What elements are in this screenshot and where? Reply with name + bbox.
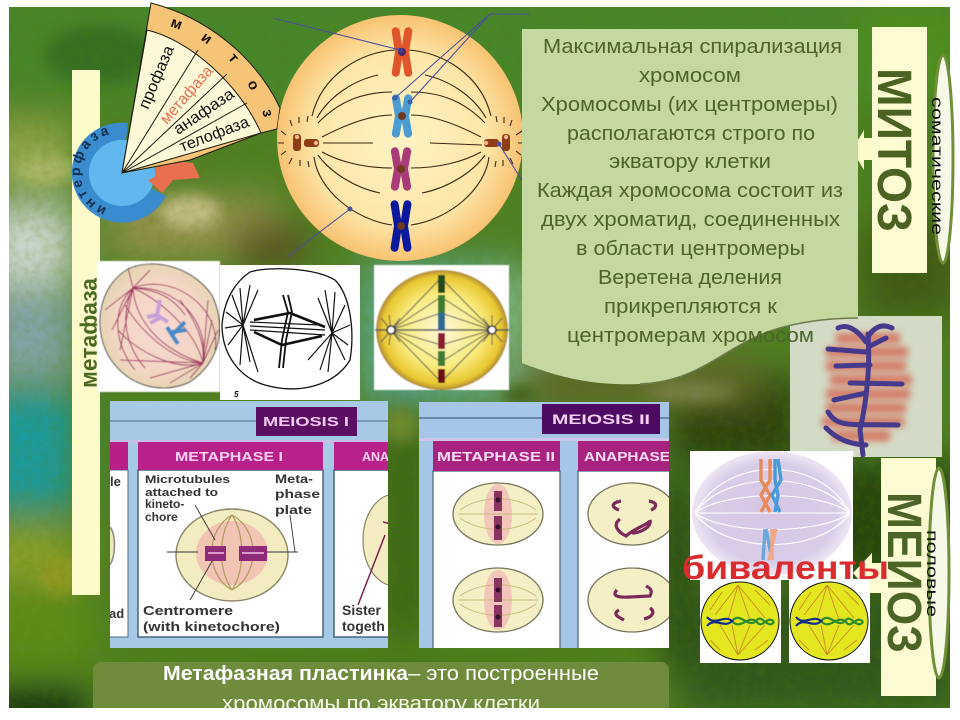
- mitosis phase fan: о: [243, 77, 263, 93]
- label: половые: половые: [923, 530, 940, 617]
- label: МЕИОЗ: [877, 458, 936, 696]
- text: metaphase I labels: chore: [145, 510, 178, 524]
- text: metaphase I labels: kineto-: [145, 497, 184, 511]
- diagram: yellow spindle cell: [374, 265, 509, 390]
- icon: orange return arrow: [148, 160, 200, 193]
- heading: MEIOSIS II: [542, 404, 660, 434]
- text panel: metaphase in mitosis: двух хроматид, соединенных: [541, 209, 840, 231]
- column: metaphase II: [433, 441, 560, 651]
- mitosis phase fan: [122, 3, 280, 173]
- mitosis phase fan: и: [198, 29, 215, 48]
- text panel: metaphase in mitosis: Максимальная спирализация: [543, 36, 842, 58]
- label: половые: [923, 468, 949, 678]
- text: metaphase I labels: attached to: [145, 487, 218, 499]
- micrograph: pink spindle cell: [97, 261, 220, 392]
- text: metaphase I labels: (with kinetochore): [143, 620, 280, 634]
- left label bar: метафаза: метафаза: [76, 277, 103, 388]
- leader lines: [273, 14, 530, 257]
- column: anaphase I fragment: ANA: [362, 450, 389, 464]
- label: биваленты: биваленты: [682, 549, 889, 586]
- column: metaphase I: [138, 442, 323, 637]
- label: МИТОЗ: [867, 27, 927, 273]
- centrosomes: [293, 134, 510, 151]
- cell diagram: metaphase spindle: [273, 14, 530, 261]
- text panel: metaphase in mitosis: прикрепляются к: [604, 296, 777, 318]
- panel: meiosis I: [110, 401, 388, 648]
- diagram: yellow cell with bivalents right: [789, 579, 870, 663]
- cell: metaphase I: [167, 505, 298, 601]
- text: metaphase I labels: phase: [275, 487, 320, 501]
- cell: anaphase II bottom: [588, 568, 676, 632]
- label: МЕИОЗ: МЕИОЗ: [877, 492, 930, 653]
- column: anaphase II: ANAPHASE: [584, 450, 670, 464]
- text panel: metaphase in mitosis: Хромосомы (их центромеры): [541, 94, 838, 116]
- column: previous phase fragment: ad: [109, 606, 124, 621]
- cell: metaphase II bottom: [453, 568, 543, 632]
- text panel: metaphase in mitosis: располагаются строго по: [567, 123, 815, 145]
- text panel: metaphase in mitosis: в области центромеры: [576, 238, 805, 260]
- text: metaphase I labels: [143, 472, 320, 634]
- heading: MEIOSIS I: MEIOSIS I: [263, 414, 349, 429]
- text: metaphase I labels: plate: [275, 503, 312, 517]
- column: previous phase fragment: le: [110, 474, 121, 489]
- text: metaphase I labels: Microtubules: [145, 474, 230, 486]
- arrow: meiosis: [853, 553, 881, 593]
- text panel: metaphase in mitosis: Каждая хромосома состоит из: [537, 180, 843, 202]
- column: anaphase II: [578, 441, 678, 651]
- column: metaphase II: METAPHASE II: [437, 450, 555, 464]
- arrow: mitosis to text: [852, 130, 872, 170]
- interphase ring: интерфаза: [72, 128, 110, 215]
- mitosis phase fan: профаза: [136, 43, 178, 112]
- mitosis phase fan: телофаза: [177, 114, 252, 156]
- text: metaphase I labels: Centromere: [143, 604, 233, 618]
- chromosome: dark blue: [390, 200, 412, 252]
- column: anaphase I fragment: togeth: [342, 618, 385, 634]
- panel: meiosis II: [419, 402, 678, 651]
- mitosis phase fan: м: [168, 14, 185, 34]
- interphase ring: [72, 122, 166, 223]
- column: anaphase I fragment: Sister: [342, 602, 381, 618]
- text panel: metaphase in mitosis: [522, 29, 858, 384]
- label: соматические: соматические: [928, 97, 945, 235]
- chromosome: light blue: [391, 94, 413, 138]
- definition bar: metaphase plate: хромосомы по экватору клетки: [222, 693, 540, 715]
- definition bar: metaphase plate: – это построенные: [408, 663, 599, 685]
- mitosis phase fan: т: [225, 50, 242, 66]
- definition bar: metaphase plate: Метафазная пластинка: [163, 663, 409, 685]
- column: metaphase I: METAPHASE I: [175, 450, 283, 464]
- label: соматические: [928, 55, 953, 263]
- column: previous phase fragment: [110, 442, 128, 638]
- mitosis phase fan: анафаза: [171, 86, 238, 138]
- text panel: metaphase in mitosis: Веретена деления: [598, 267, 782, 289]
- column: anaphase I fragment: [333, 442, 388, 638]
- cell: anaphase II top: [588, 483, 676, 545]
- heading: MEIOSIS II: MEIOSIS II: [552, 411, 650, 427]
- mitosis phase fan: метафаза: [157, 63, 217, 128]
- drawing: black and white spindle: [220, 265, 360, 400]
- label: МИТОЗ: МИТОЗ: [867, 68, 920, 232]
- chromosome: purple: [390, 147, 412, 191]
- diagram: lilac meiotic spindle: [690, 451, 853, 580]
- chromosome: orange: [391, 27, 413, 77]
- text: metaphase I labels: Meta-: [275, 472, 313, 486]
- text panel: metaphase in mitosis: центромерам хромосом: [567, 325, 814, 347]
- left label bar: метафаза: [72, 70, 103, 595]
- heading: MEIOSIS I: [256, 407, 357, 436]
- text panel: metaphase in mitosis: хромосом: [639, 65, 741, 87]
- definition bar: metaphase plate: [93, 662, 669, 708]
- drawing: black and white spindle: 5: [234, 390, 239, 399]
- text panel: metaphase in mitosis: экватору клетки: [609, 151, 771, 173]
- micrograph: chromosomes on metaphase plate: [790, 316, 942, 457]
- mitosis phase fan: з: [258, 108, 276, 118]
- cell: metaphase II top: [453, 483, 543, 545]
- diagram: yellow cell with bivalents left: [700, 579, 781, 663]
